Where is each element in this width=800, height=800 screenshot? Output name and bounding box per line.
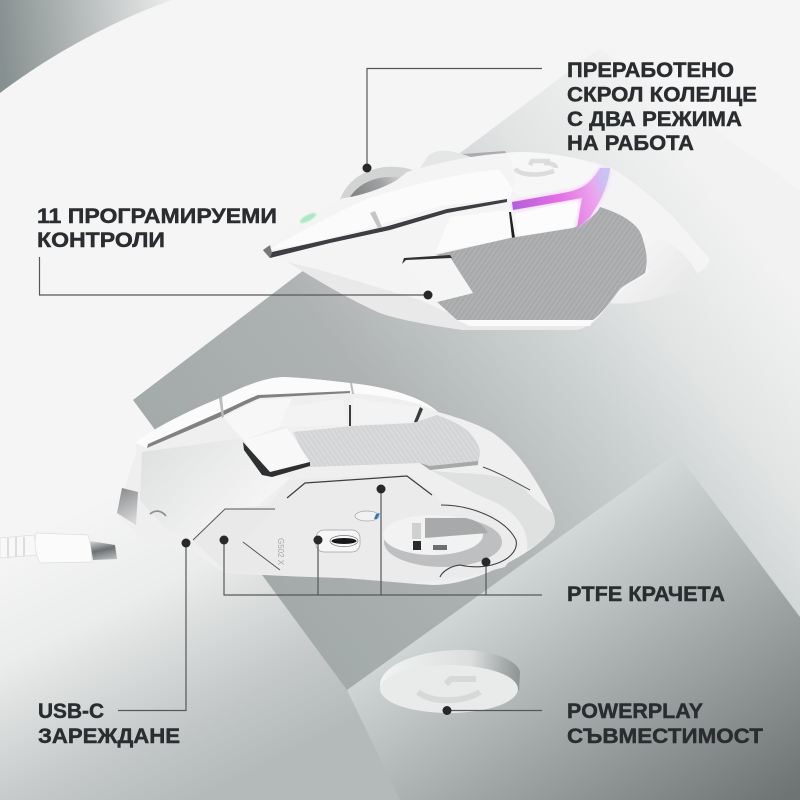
- diagonal grey shape: [133, 48, 800, 800]
- rear shading: [610, 232, 697, 303]
- disc face: [380, 665, 518, 713]
- logo panel: [507, 152, 604, 197]
- side buttons: [435, 210, 512, 253]
- bottom strip: [457, 320, 593, 326]
- pink light band: [512, 168, 610, 228]
- sensor: [316, 530, 360, 552]
- scroll wheel: [340, 167, 416, 204]
- paddle shadow: [243, 442, 310, 477]
- side panel: [223, 398, 292, 440]
- top ridge strips: [135, 377, 438, 448]
- label: scroll wheel: СКРОЛ КОЛЕЛЦЕ: [567, 84, 757, 106]
- label: scroll wheel: С ДВА РЕЖИМА: [567, 108, 742, 131]
- right skate edge: [440, 505, 516, 577]
- thumb paddle: [403, 258, 473, 302]
- label: programmable controls: КОНТРОЛИ: [37, 229, 165, 252]
- mouse body: [263, 152, 710, 330]
- label barcode: [413, 541, 421, 550]
- top mouse: [263, 151, 710, 330]
- label: powerplay: POWERPLAY: [567, 700, 703, 723]
- outer seam: [483, 467, 530, 490]
- upper shell highlight: [268, 170, 513, 250]
- callout: scroll wheel: [362, 59, 757, 172]
- label: programmable controls: [37, 205, 277, 252]
- logo mark on shell: [150, 511, 166, 516]
- label: scroll wheel: НА РАБОТА: [567, 132, 694, 155]
- grip edge: [420, 461, 478, 470]
- logo: [515, 161, 556, 175]
- body shading: [287, 262, 593, 330]
- top buttons: [420, 151, 507, 172]
- braided cable: [0, 535, 38, 558]
- top skate edge: [287, 476, 432, 498]
- bottom mouse: [117, 377, 555, 585]
- ridge notches: [219, 383, 354, 418]
- left skate: [193, 509, 280, 572]
- usb-c cable: [0, 533, 117, 563]
- powerplay disc: [380, 650, 520, 713]
- callout: usb-c charging: [38, 538, 190, 748]
- callout: powerplay: [442, 700, 763, 748]
- label: usb-c charging: USB-C: [38, 700, 104, 723]
- paddle shadow: [402, 255, 452, 264]
- battery cavity: [383, 515, 502, 567]
- disc rim: [380, 650, 520, 712]
- label: usb-c charging: [38, 700, 180, 748]
- grip texture: [293, 415, 480, 470]
- ridge seam: [147, 391, 350, 448]
- pink glow: [512, 168, 610, 228]
- disc logo: [418, 679, 480, 700]
- cavity inner block: [425, 518, 488, 538]
- corner arc shape: [0, 0, 172, 93]
- rear metal window: [117, 488, 138, 525]
- base plate: [193, 474, 521, 583]
- connector housing: [35, 533, 92, 563]
- tip edge: [263, 245, 272, 258]
- sticker: [412, 523, 421, 539]
- seam notch: [370, 211, 382, 228]
- label: powerplay: СЪВМЕСТИМОСТ: [567, 725, 763, 748]
- button gap: [509, 212, 515, 238]
- grip texture: [435, 207, 647, 320]
- button gap: [349, 405, 423, 426]
- side buttons: [280, 398, 420, 427]
- model text: G502 X: [276, 538, 285, 566]
- dark seam: [263, 199, 507, 258]
- thumb paddle: [243, 428, 310, 472]
- callout: ptfe feet: [220, 484, 725, 606]
- label: programmable controls: 11 ПРОГРАМИРУЕМИ: [37, 205, 277, 228]
- green glow: [299, 211, 317, 225]
- underside body: [117, 377, 555, 585]
- label: usb-c charging: ЗАРЕЖДАНЕ: [38, 725, 180, 748]
- small sensor window: [355, 511, 380, 521]
- callout: programmable controls: [37, 205, 432, 300]
- left skate edge: [193, 509, 280, 570]
- palm side shading: [140, 438, 290, 540]
- metal plug: [90, 541, 117, 560]
- label: scroll wheel: [567, 59, 757, 155]
- lower gradient shape: [347, 453, 800, 800]
- rear shell: [430, 470, 555, 550]
- label: scroll wheel: ПРЕРАБОТЕНО: [567, 59, 734, 82]
- label: powerplay: [567, 700, 763, 748]
- label: ptfe feet: PTFE КРАЧЕТА: [567, 583, 725, 606]
